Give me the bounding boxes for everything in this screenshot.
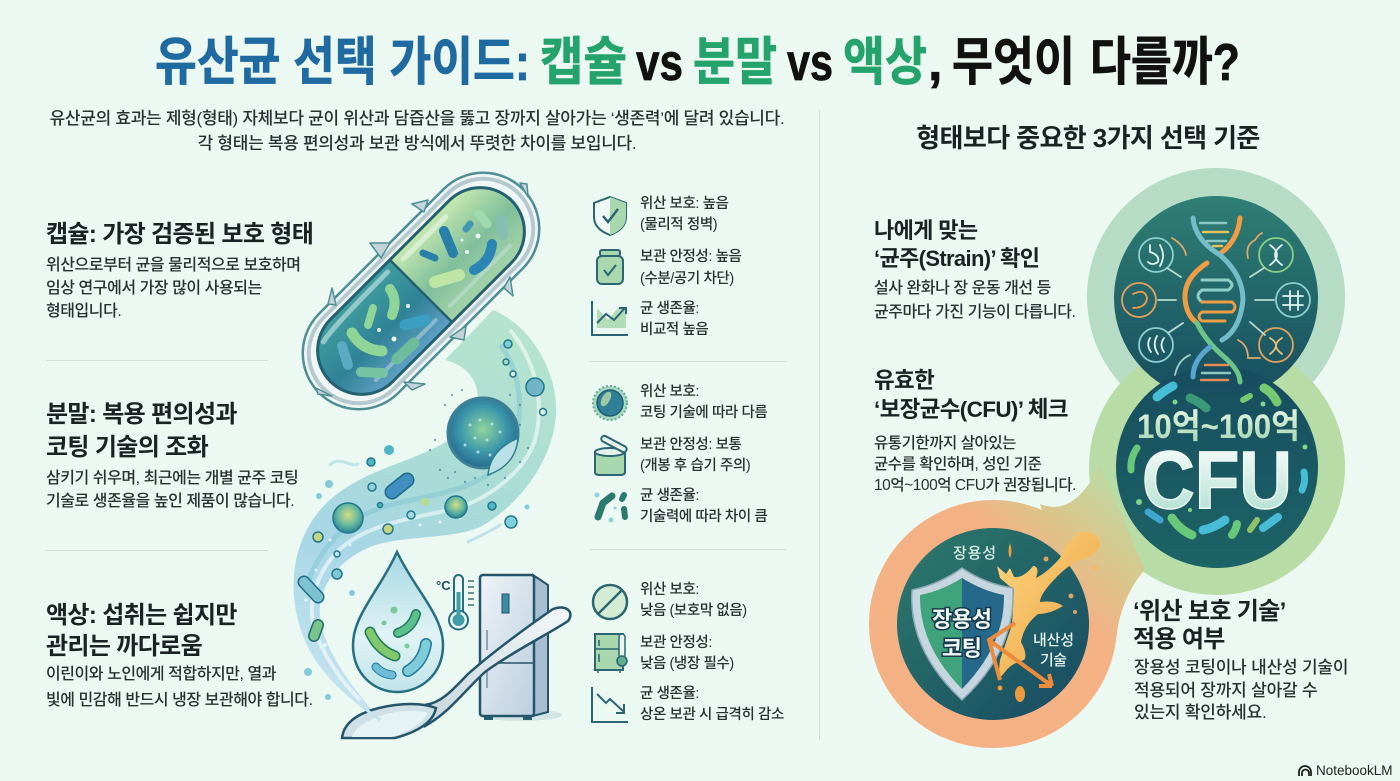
fact: stomach protection	[640, 196, 729, 233]
criterion 2 heading	[874, 368, 1068, 422]
backdrop circles and connector	[869, 168, 1345, 748]
criterion 3 body: 적용되어 장까지 살아갈 수	[1134, 680, 1317, 700]
fact: survival rate: 균 생존율:	[640, 686, 699, 702]
fact: survival rate	[640, 300, 708, 338]
capsule facts	[640, 196, 742, 338]
intro text: 유산균의 효과는 제형(형태) 자체보다 균이 위산과 담즙산을 뚫고 장까지 살아가는 ‘생존력’에 달려 있습니다.	[50, 109, 784, 128]
main title: 액상	[843, 34, 927, 92]
fact: storage stability	[640, 634, 734, 672]
circle: enteric coating shield	[897, 528, 1100, 720]
liquid body	[46, 665, 313, 709]
icon: rising chart	[592, 301, 628, 335]
CFU label: CFU	[1142, 435, 1292, 526]
stream bacteria	[304, 480, 407, 636]
right heading: 형태보다 중요한 3가지 선택 기준	[916, 123, 1260, 153]
divider	[46, 360, 268, 361]
liquid heading: 관리는 까다로움	[46, 633, 202, 660]
powder heading	[46, 401, 237, 461]
criterion 1 heading: 나에게 맞는	[874, 218, 977, 243]
criterion 2 heading: 유효한	[874, 368, 934, 393]
fact: storage stability	[640, 436, 750, 474]
criterion 1 body	[874, 280, 1076, 321]
criterion 3 body: 장용성 코팅이나 내산성 기술이	[1134, 658, 1348, 677]
circle: strain panel	[1114, 196, 1318, 400]
powder body: 기술로 생존율을 높인 제품이 많습니다.	[46, 493, 294, 510]
fact: stomach protection: 낮음 (보호막 없음)	[640, 603, 747, 619]
CFU range label: 10억~100억	[1137, 408, 1300, 446]
main title: 유산균 선택 가이드:	[155, 34, 530, 92]
capsule body: 위산으로부터 균을 물리적으로 보호하며	[46, 257, 301, 274]
fact: storage stability: 보관 안정성:	[640, 635, 712, 651]
icon: bacteria cluster	[594, 492, 625, 522]
vertical divider	[819, 110, 820, 740]
capsule	[280, 150, 562, 432]
main title: 분말	[693, 34, 777, 92]
fact: survival rate: 상온 보관 시 급격히 감소	[640, 707, 784, 723]
main title	[155, 34, 1240, 92]
liquid body: 빛에 민감해 반드시 냉장 보관해야 합니다.	[46, 692, 313, 709]
criterion 2 body: 유통기한까지 살아있는	[874, 435, 1016, 452]
powder body: 삼키기 쉬우며, 최근에는 개별 균주 코팅	[46, 470, 298, 487]
fact: survival rate: 균 생존율:	[640, 301, 699, 317]
criterion 3 heading: 적용 여부	[1133, 626, 1225, 653]
thermometer: °C	[436, 578, 451, 593]
criterion 3 heading	[1133, 598, 1286, 653]
divider	[46, 550, 268, 551]
DNA and function icons	[1122, 218, 1310, 382]
main title: ,	[928, 34, 942, 92]
criterion 1 body: 균주마다 가진 기능이 다릅니다.	[874, 304, 1076, 321]
swirl stream	[294, 310, 556, 720]
icon: shield check	[594, 197, 626, 235]
icon: jar	[597, 250, 623, 284]
criterion 2 body: 10억~100억 CFU가 권장됩니다.	[874, 477, 1076, 494]
fact: survival rate: 비교적 높음	[640, 322, 708, 338]
top label: 장용성	[953, 545, 996, 562]
mini function icons	[1122, 233, 1310, 375]
intro text	[50, 109, 784, 153]
criterion 1 heading	[874, 218, 1039, 271]
fact: stomach protection: 코팅 기술에 따라 다름	[640, 405, 767, 421]
fact: storage stability: (개봉 후 습기 주의)	[640, 458, 750, 474]
fact: stomach protection	[640, 582, 747, 619]
liquid heading	[46, 602, 237, 660]
coated sphere	[448, 398, 518, 475]
acid resistance label: 내산성	[1033, 632, 1074, 649]
fact: stomach protection: 위산 보호:	[640, 384, 699, 400]
main title: 무엇이	[952, 34, 1075, 92]
powder body	[46, 470, 298, 510]
main title: 다를까?	[1090, 34, 1240, 92]
powder heading: 코팅 기술의 조화	[46, 434, 208, 461]
icon: falling chart	[592, 687, 628, 722]
NotebookLM wordmark: NotebookLM	[1316, 763, 1393, 778]
powder heading: 분말: 복용 편의성과	[46, 401, 237, 428]
main title: vs	[787, 34, 833, 92]
powder facts	[640, 384, 768, 525]
refrigerator	[478, 575, 562, 721]
shield: 장용성	[932, 607, 992, 632]
acid splash	[997, 532, 1100, 702]
criterion 1 body: 설사 완화나 장 운동 개선 등	[874, 280, 1051, 297]
icon: NotebookLM logo	[1299, 766, 1311, 776]
icon: coated granule	[593, 386, 627, 420]
criterion 2 heading: ‘보장균수(CFU)’ 체크	[874, 397, 1068, 422]
shield: 코팅	[942, 636, 982, 661]
divider	[590, 361, 786, 362]
criterion 3 body	[1134, 658, 1348, 722]
deflection arrow	[989, 623, 1052, 686]
capsule body: 형태입니다.	[46, 303, 121, 320]
fact: storage stability: 보관 안정성: 높음	[640, 249, 741, 265]
stream particles	[313, 340, 546, 579]
fact: storage stability	[640, 248, 742, 287]
fact: stomach protection	[640, 384, 768, 421]
fact: survival rate: 기술력에 따라 차이 큼	[640, 509, 767, 525]
CFU bacteria	[1131, 386, 1305, 535]
shield	[912, 568, 1013, 700]
circle: CFU panel	[1116, 366, 1318, 568]
capsule bacteria	[342, 214, 503, 373]
icon: fridge with thermometer	[595, 634, 627, 673]
fact: storage stability: 낮음 (냉장 필수)	[640, 656, 734, 672]
criterion 3 body: 있는지 확인하세요.	[1134, 703, 1267, 722]
liquid body: 이린이와 노인에게 적합하지만, 열과	[46, 666, 276, 683]
main title: 캡슐	[540, 34, 627, 92]
DNA helix	[1185, 218, 1243, 382]
fact: storage stability: (수분/공기 차단)	[640, 271, 734, 287]
liquid heading: 액상: 섭취는 쉽지만	[46, 602, 237, 629]
criterion 2 body: 균수를 확인하며, 성인 기준	[874, 456, 1041, 473]
intro text: 각 형태는 복용 편의성과 보관 방식에서 뚜렷한 차이를 보입니다.	[198, 134, 636, 153]
criterion 1 heading: ‘균주(Strain)’ 확인	[874, 246, 1039, 271]
criterion 3 heading: ‘위산 보호 기술’	[1133, 598, 1286, 625]
divider	[590, 549, 786, 550]
icon: open tin	[595, 435, 628, 475]
thermometer	[436, 575, 474, 630]
capsule heading: 캡슐: 가장 검증된 보호 형태	[46, 221, 313, 248]
acid resistance label line 2: 기술	[1040, 652, 1067, 669]
capsule frame ornaments	[316, 183, 528, 396]
icon: no protection	[593, 585, 627, 619]
fact: storage stability: 보관 안정성: 보통	[640, 437, 741, 453]
capsule body	[46, 256, 301, 320]
liquid facts	[640, 582, 784, 723]
fact: survival rate: 균 생존율:	[640, 488, 699, 504]
spoon with powder	[342, 607, 570, 738]
main title: vs	[636, 34, 683, 92]
fact: survival rate	[640, 488, 768, 525]
criterion 2 body	[874, 435, 1076, 494]
fact: stomach protection: 위산 보호: 높음	[640, 196, 729, 212]
fact: stomach protection: 위산 보호:	[640, 582, 699, 598]
fact: stomach protection: (물리적 정벽)	[640, 217, 717, 233]
capsule body: 임상 연구에서 가장 많이 사용되는	[46, 280, 262, 297]
fact: survival rate	[640, 686, 784, 723]
CFU content	[1131, 386, 1308, 535]
liquid droplet	[353, 552, 443, 692]
